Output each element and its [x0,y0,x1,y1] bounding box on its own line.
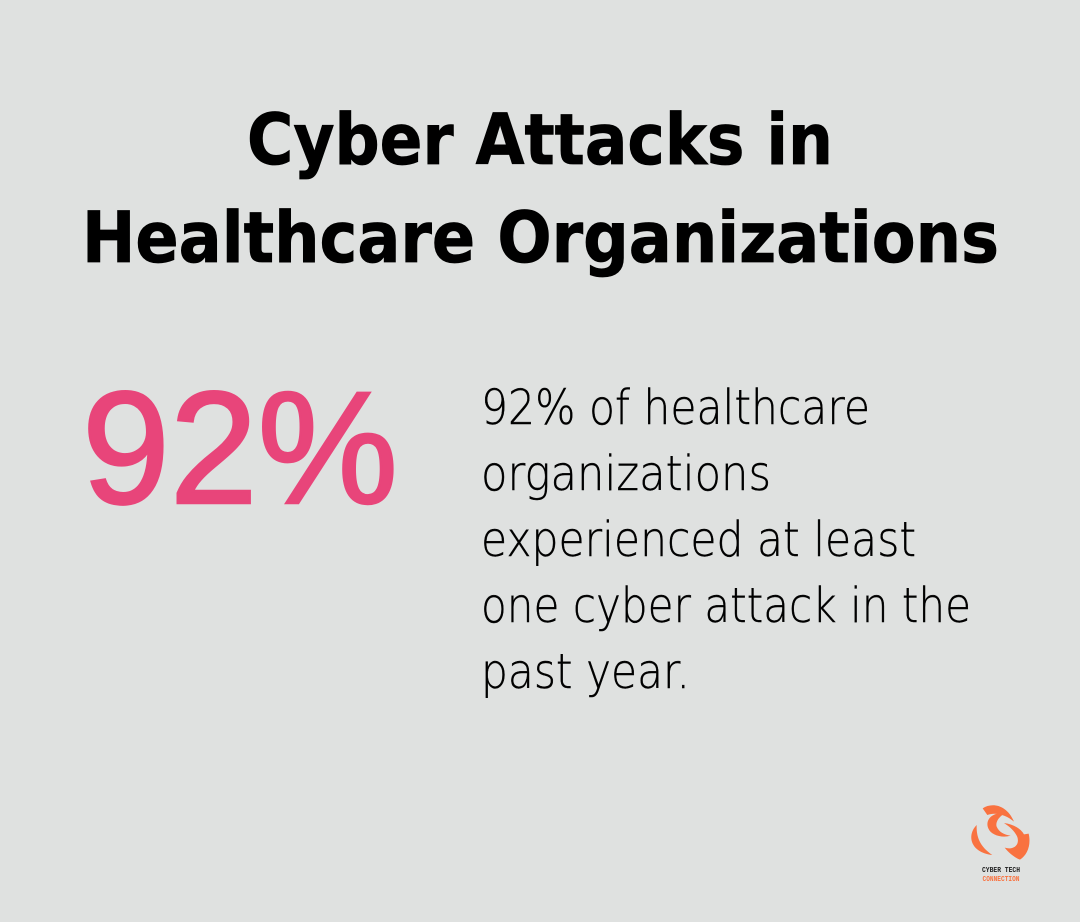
icon: three swoosh mark [971,805,1029,860]
stat description: organizations [481,446,771,502]
logo: Cyber Tech Connection [971,805,1029,884]
title: Healthcare Organizations [82,197,999,279]
stat description [481,380,971,700]
title [82,99,999,279]
logo wordmark: CYBER TECH [982,867,1020,875]
stat description: 92% of healthcare [481,380,870,436]
stat description: experienced at least [481,512,916,568]
title: Cyber Attacks in [247,99,833,181]
logo: Cyber Tech Connection: CONNECTION [982,876,1020,884]
big stat: 92%: 92% [82,358,398,537]
stat description: one cyber attack in the [481,578,971,634]
stat description: past year. [481,644,690,700]
